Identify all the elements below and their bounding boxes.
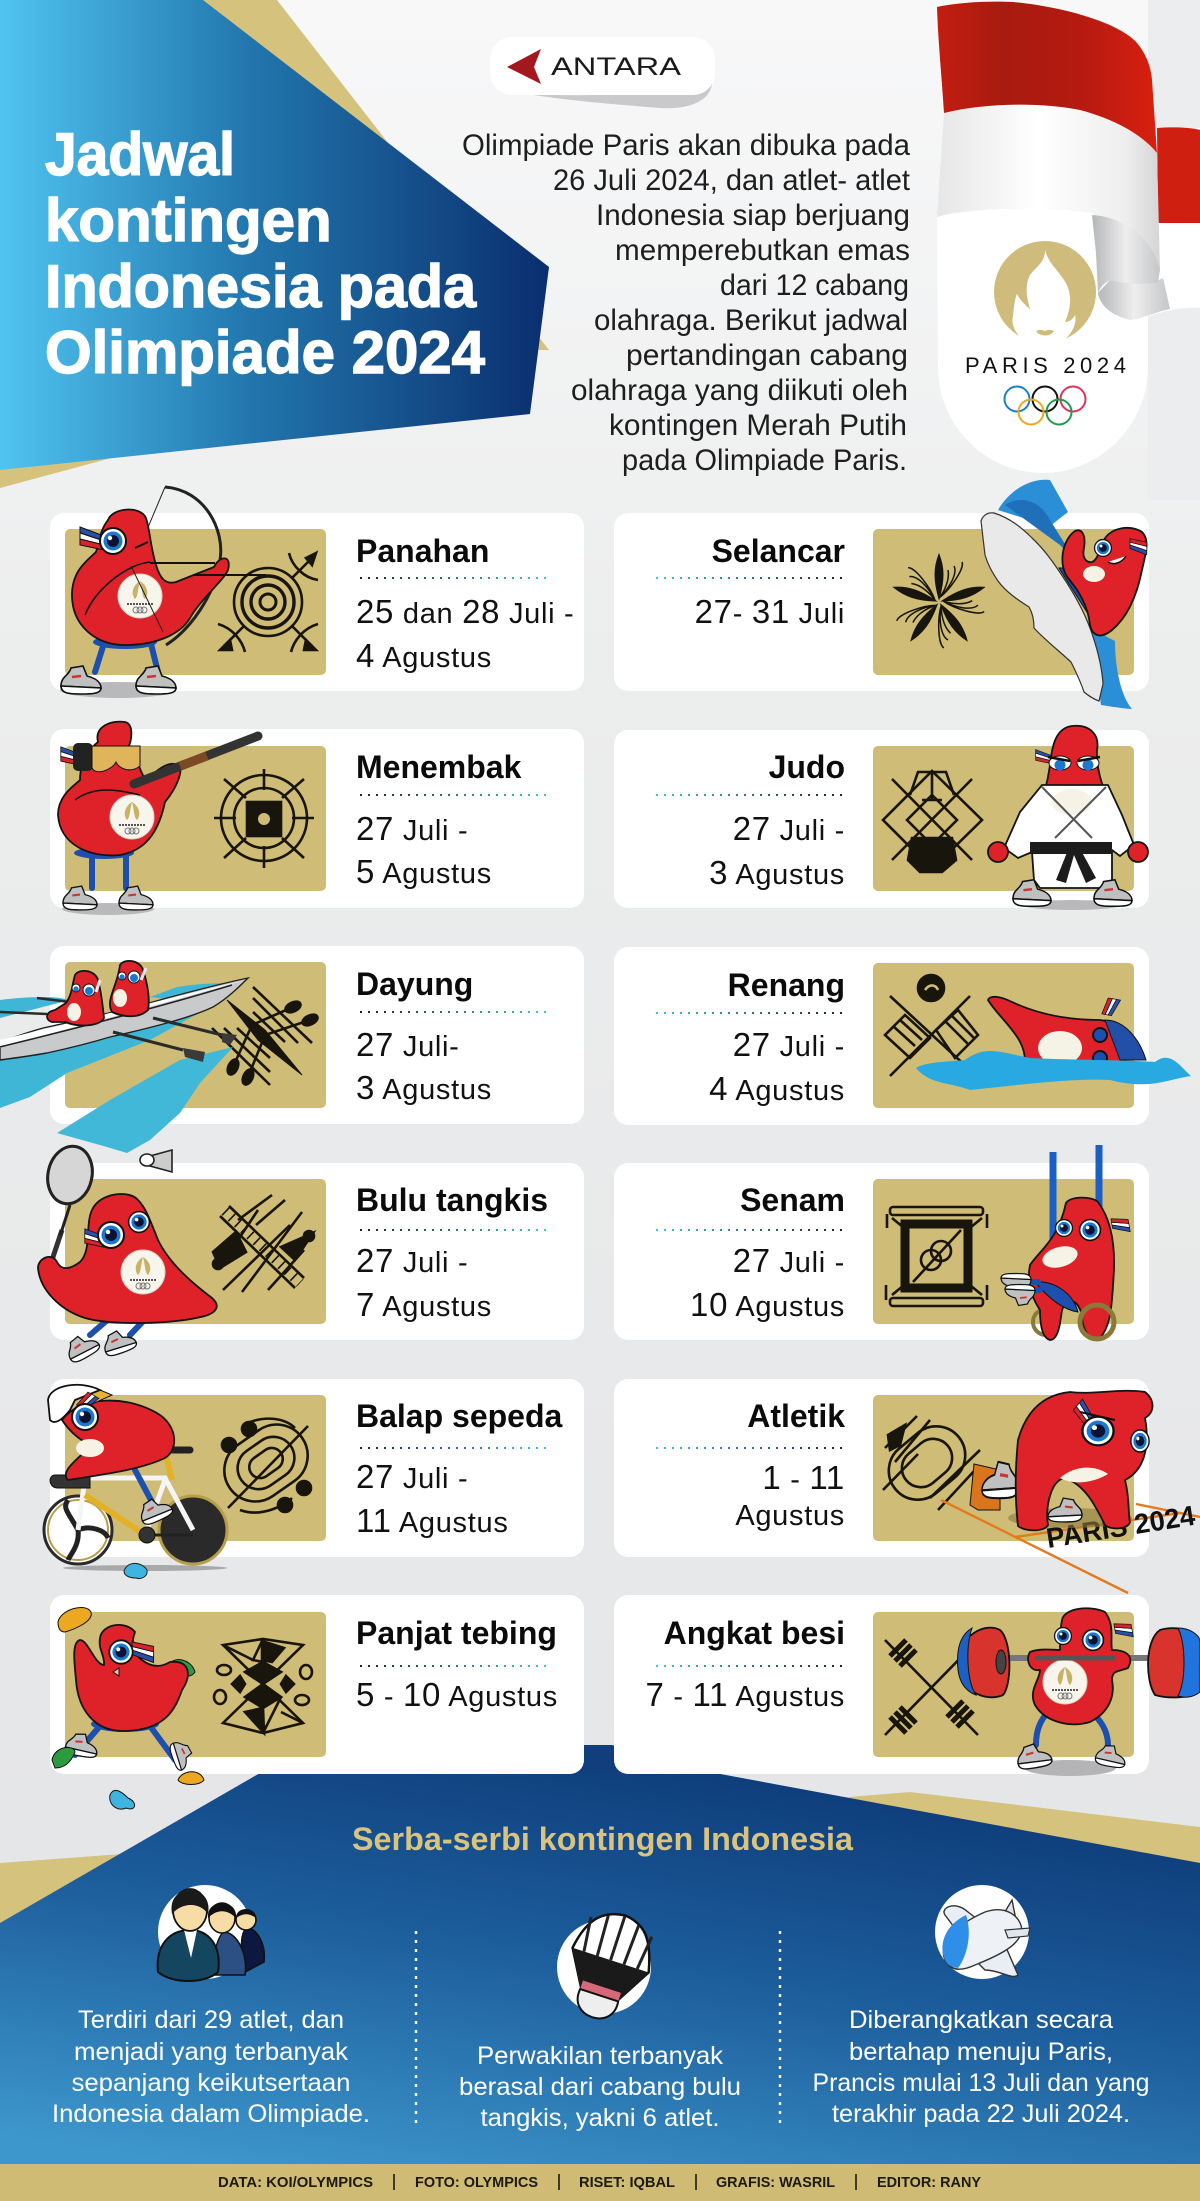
- small flag: [1120, 127, 1200, 316]
- icon: surfing pinwheel pictogram: [892, 555, 991, 654]
- mascot: athletics: [941, 1391, 1200, 1593]
- text block: athletes: [52, 2006, 370, 2128]
- panel: Senam: [614, 1163, 1149, 1340]
- heading: Atletik: [747, 1398, 845, 1434]
- dates: 27 Juli -: [356, 810, 468, 847]
- heading: Menembak: [356, 749, 522, 785]
- icon: climbing pictogram: [214, 1639, 312, 1733]
- emblem flame: [994, 241, 1096, 350]
- flag and Paris 2024 emblem: [937, 2, 1200, 473]
- text block: departure: bertahap menuju Paris,: [849, 2038, 1113, 2066]
- title: Olimpiade 2024: [45, 319, 486, 386]
- text block: athletes: menjadi yang terbanyak: [74, 2038, 348, 2066]
- text block: badminton: tangkis, yakni 6 atlet.: [480, 2104, 720, 2132]
- heading: Bulu tangkis: [356, 1182, 548, 1218]
- panel: Menembak: [50, 729, 584, 908]
- dates: 5 - 10 Agustus: [356, 1676, 558, 1713]
- intro text: [462, 129, 911, 477]
- heading: Senam: [740, 1182, 845, 1218]
- icon: airplane: [935, 1885, 1030, 1979]
- ANTARA logo: [490, 37, 715, 108]
- panel: Selancar: [614, 513, 1149, 691]
- icon: weightlifting pictogram: [885, 1640, 978, 1735]
- mascot: swimming: [916, 997, 1191, 1090]
- text block: departure: Prancis mulai 13 Juli dan yang: [812, 2069, 1150, 2097]
- icon: shuttlecock: [140, 1150, 172, 1172]
- intro text: Indonesia siap berjuang: [596, 199, 910, 232]
- dates: 27 Juli -: [356, 1458, 468, 1495]
- mascot: surfing: [981, 480, 1147, 709]
- panel: Judo: [614, 730, 1149, 908]
- intro text: dari 12 cabang: [720, 269, 909, 302]
- mascot: badminton: [38, 1142, 217, 1365]
- heading: Renang: [728, 967, 845, 1003]
- label: Paris 2024 on track: PARIS 2024: [1044, 1500, 1198, 1554]
- panel: Judo: 3 Agustus: [709, 854, 845, 891]
- footer credits: [218, 2174, 981, 2191]
- panel: Panjat tebing: [50, 1595, 584, 1774]
- mascot: weightlifting: [958, 1608, 1200, 1776]
- icon: athletics pictogram: [877, 1414, 980, 1512]
- dates: 25 dan 28 Juli -: [356, 593, 574, 630]
- intro text: pada Olimpiade Paris.: [622, 444, 907, 477]
- heading: Dayung: [356, 966, 473, 1002]
- dates: 27 Juli -: [356, 1242, 468, 1279]
- flag fold: [1092, 215, 1170, 320]
- icon: shooting target: [214, 769, 314, 868]
- mascot: gymnastics: [1001, 1145, 1130, 1340]
- heading: Selancar: [712, 533, 845, 569]
- column divider dots: [415, 1931, 417, 2126]
- panel: Renang: 4 Agustus: [709, 1070, 845, 1107]
- intro text: pertandingan cabang: [626, 339, 908, 372]
- panel: Renang: [614, 947, 1149, 1125]
- mascot: shooting: [58, 722, 258, 915]
- title: Jadwal: [45, 121, 235, 188]
- dates: 1 - 11: [762, 1459, 845, 1496]
- dates: 27 Juli -: [733, 1242, 845, 1279]
- icon: gymnastics pictogram: [886, 1207, 987, 1306]
- intro text: kontingen Merah Putih: [609, 409, 907, 442]
- text block: departure: [812, 2006, 1150, 2128]
- text block: athletes: Terdiri dari 29 atlet, dan: [78, 2006, 344, 2034]
- footer credits: EDITOR: RANY: [877, 2175, 981, 2191]
- intro text: olahraga. Berikut jadwal: [594, 304, 908, 337]
- dates: 27 Juli-: [356, 1026, 460, 1063]
- mascot: climbing: [52, 1607, 204, 1809]
- heading: Angkat besi: [664, 1615, 845, 1651]
- icon: climbing holds: [52, 1747, 204, 1809]
- panel: Senam: 10 Agustus: [690, 1286, 845, 1323]
- intro text: olahraga yang diikuti oleh: [571, 374, 908, 407]
- flag and Paris 2024 emblem: PARIS 2024: [965, 353, 1126, 378]
- icon: cycling track pictogram: [212, 1412, 320, 1514]
- dates: 27 Juli -: [733, 1026, 845, 1063]
- mascot: rowing: [0, 961, 248, 1153]
- icon: judo pictogram: [883, 771, 982, 872]
- heading: Panahan: [356, 533, 489, 569]
- title: kontingen: [45, 187, 332, 254]
- heading: Judo: [769, 749, 845, 785]
- panel: Dayung: [50, 946, 584, 1124]
- dates: 7 - 11 Agustus: [646, 1676, 845, 1713]
- icon: blue climbing hold: [124, 1563, 147, 1579]
- panel: Atletik: [614, 1379, 1149, 1557]
- panel: Bulu tangkis: [50, 1163, 584, 1340]
- mascot: archery: [60, 487, 266, 698]
- panel: Menembak: 5 Agustus: [356, 853, 492, 890]
- bottom section background: [0, 1745, 1200, 2201]
- icon: swimming pictogram: [885, 975, 978, 1076]
- dates: 27- 31 Juli: [695, 593, 845, 630]
- icon: rowing pictogram: [212, 987, 319, 1086]
- ANTARA logo: ANTARA: [551, 53, 681, 81]
- text block: badminton: berasal dari cabang bulu: [459, 2073, 741, 2101]
- footer credits: FOTO: OLYMPICS: [415, 2175, 538, 2191]
- panel: Atletik: Agustus: [735, 1500, 845, 1532]
- main flag: [937, 2, 1160, 270]
- title: [45, 121, 486, 386]
- panel: Angkat besi: [614, 1595, 1149, 1774]
- intro text: memperebutkan emas: [615, 234, 910, 267]
- panel: Balap sepeda: [50, 1379, 584, 1557]
- icon: badminton pictogram: [213, 1195, 314, 1292]
- footer credits: DATA: KOI/OLYMPICS: [218, 2175, 373, 2191]
- text block: badminton: [459, 2042, 741, 2132]
- dates: 27 Juli -: [733, 810, 845, 847]
- mascot: cycling: [44, 1385, 227, 1579]
- panel: Panahan: [50, 513, 584, 691]
- mascot: judo: [988, 726, 1148, 910]
- intro text: 26 Juli 2024, dan atlet- atlet: [553, 164, 910, 197]
- icon: athletes group: [158, 1885, 264, 1981]
- heading: Panjat tebing: [356, 1615, 557, 1651]
- intro text: Olimpiade Paris akan dibuka pada: [462, 129, 911, 162]
- text block: athletes: Indonesia dalam Olimpiade.: [52, 2100, 370, 2128]
- title banner: [0, 0, 549, 488]
- panel: Bulu tangkis: 7 Agustus: [356, 1286, 492, 1323]
- icon: shuttlecock: [554, 1903, 663, 2030]
- footer credits: RISET: IQBAL: [579, 2175, 675, 2191]
- panel: Dayung: 3 Agustus: [356, 1069, 492, 1106]
- section heading: Serba-serbi kontingen Indonesia: [352, 1821, 854, 1857]
- footer credits: GRAFIS: WASRIL: [716, 2175, 835, 2191]
- text block: departure: terakhir pada 22 Juli 2024.: [832, 2100, 1130, 2128]
- icon: archery target: [218, 553, 318, 652]
- text block: departure: Diberangkatkan secara: [849, 2006, 1114, 2034]
- text block: athletes: sepanjang keikutsertaan: [72, 2069, 350, 2097]
- title: Indonesia pada: [45, 253, 477, 320]
- panel: Balap sepeda: 11 Agustus: [356, 1502, 509, 1539]
- heading: Balap sepeda: [356, 1398, 563, 1434]
- panel: Panahan: 4 Agustus: [356, 637, 492, 674]
- text block: badminton: Perwakilan terbanyak: [477, 2042, 723, 2070]
- emblem pill: [937, 209, 1148, 473]
